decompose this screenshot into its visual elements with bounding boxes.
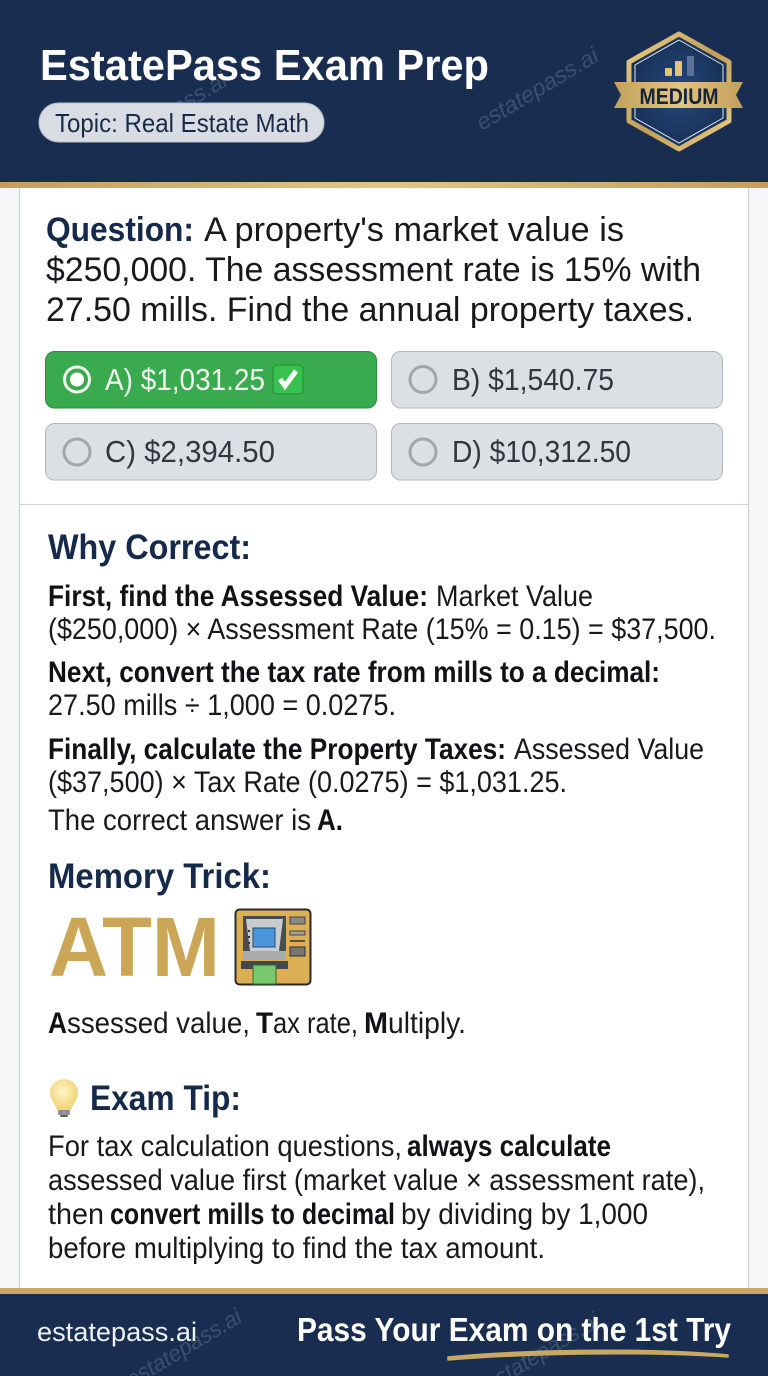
question text: Question: xyxy=(46,211,194,249)
mnemonic explanation xyxy=(48,1007,466,1040)
badge: medium difficulty xyxy=(614,34,743,149)
mnemonic explanation: A xyxy=(48,1007,67,1040)
heading: exam tip: Exam Tip: xyxy=(90,1079,241,1118)
watermark: header left: tepass.ai xyxy=(139,66,232,136)
answer option A (correct): A) $1,031.25 xyxy=(105,362,265,397)
answer option D xyxy=(392,424,722,480)
answer option C xyxy=(46,424,376,480)
explanation text: Market Value xyxy=(436,580,593,613)
mnemonic explanation: ax rate, xyxy=(273,1007,358,1040)
panel: footer xyxy=(0,1288,768,1376)
exam tip text: assessed value first (market value × assessment rate), xyxy=(48,1164,705,1197)
explanation text xyxy=(48,580,716,837)
answer option B: B) $1,540.75 xyxy=(452,362,614,397)
answer option C: C) $2,394.50 xyxy=(105,434,275,469)
badge: medium difficulty: MEDIUM xyxy=(640,84,718,109)
explanation text: 27.50 mills ÷ 1,000 = 0.0275. xyxy=(48,689,396,722)
exam tip text: by dividing by 1,000 xyxy=(401,1198,648,1231)
question text: 27.50 mills. Find the annual property taxes. xyxy=(46,291,694,329)
explanation text: A. xyxy=(317,804,343,837)
footer tagline: Pass Your Exam on the 1st Try xyxy=(297,1311,732,1348)
watermark: header right: estatepass.ai xyxy=(471,41,604,135)
topic pill: Topic: Real Estate Math xyxy=(55,108,309,138)
icon: light bulb xyxy=(50,1079,78,1117)
title: EstatePass Exam Prep xyxy=(40,41,489,90)
explanation text: Assessed Value xyxy=(514,733,704,766)
panel: header xyxy=(0,0,768,188)
exam tip text xyxy=(48,1130,705,1265)
explanation text: The correct answer is xyxy=(48,804,311,837)
tagline underline xyxy=(448,1350,728,1360)
mnemonic explanation: ultiply. xyxy=(388,1007,466,1040)
heading: memory trick: Memory Trick: xyxy=(48,857,271,896)
explanation text: Next, convert the tax rate from mills to a decimal: xyxy=(48,656,660,689)
mnemonic: ATM: ATM xyxy=(49,900,220,994)
answer option A (correct) xyxy=(46,352,376,408)
heading: why correct: Why Correct: xyxy=(48,528,251,567)
explanation text: Finally, calculate the Property Taxes: xyxy=(48,733,506,766)
question text xyxy=(46,211,701,329)
exam tip text: convert mills to decimal xyxy=(110,1198,395,1231)
question text: $250,000. The assessment rate is 15% with xyxy=(46,251,701,289)
question text: A property's market value is xyxy=(204,211,624,249)
exam tip text: always calculate xyxy=(407,1130,611,1163)
answer option B xyxy=(392,352,722,408)
explanation text: ($37,500) × Tax Rate (0.0275) = $1,031.25. xyxy=(48,766,567,799)
explanation text: First, find the Assessed Value: xyxy=(48,580,428,613)
icon: ATM machine xyxy=(236,910,310,984)
mnemonic explanation: M xyxy=(364,1007,388,1040)
icon: check mark xyxy=(273,365,303,394)
mnemonic explanation: T xyxy=(256,1007,273,1040)
footer website: estatepass.ai xyxy=(37,1317,197,1347)
exam tip text: then xyxy=(48,1198,104,1231)
exam tip text: before multiplying to find the tax amount. xyxy=(48,1232,545,1265)
explanation text: ($250,000) × Assessment Rate (15% = 0.15) = $37,500. xyxy=(48,613,716,646)
exam tip text: For tax calculation questions, xyxy=(48,1130,402,1163)
mnemonic explanation: ssessed value, xyxy=(67,1007,250,1040)
answer option D: D) $10,312.50 xyxy=(452,434,631,469)
